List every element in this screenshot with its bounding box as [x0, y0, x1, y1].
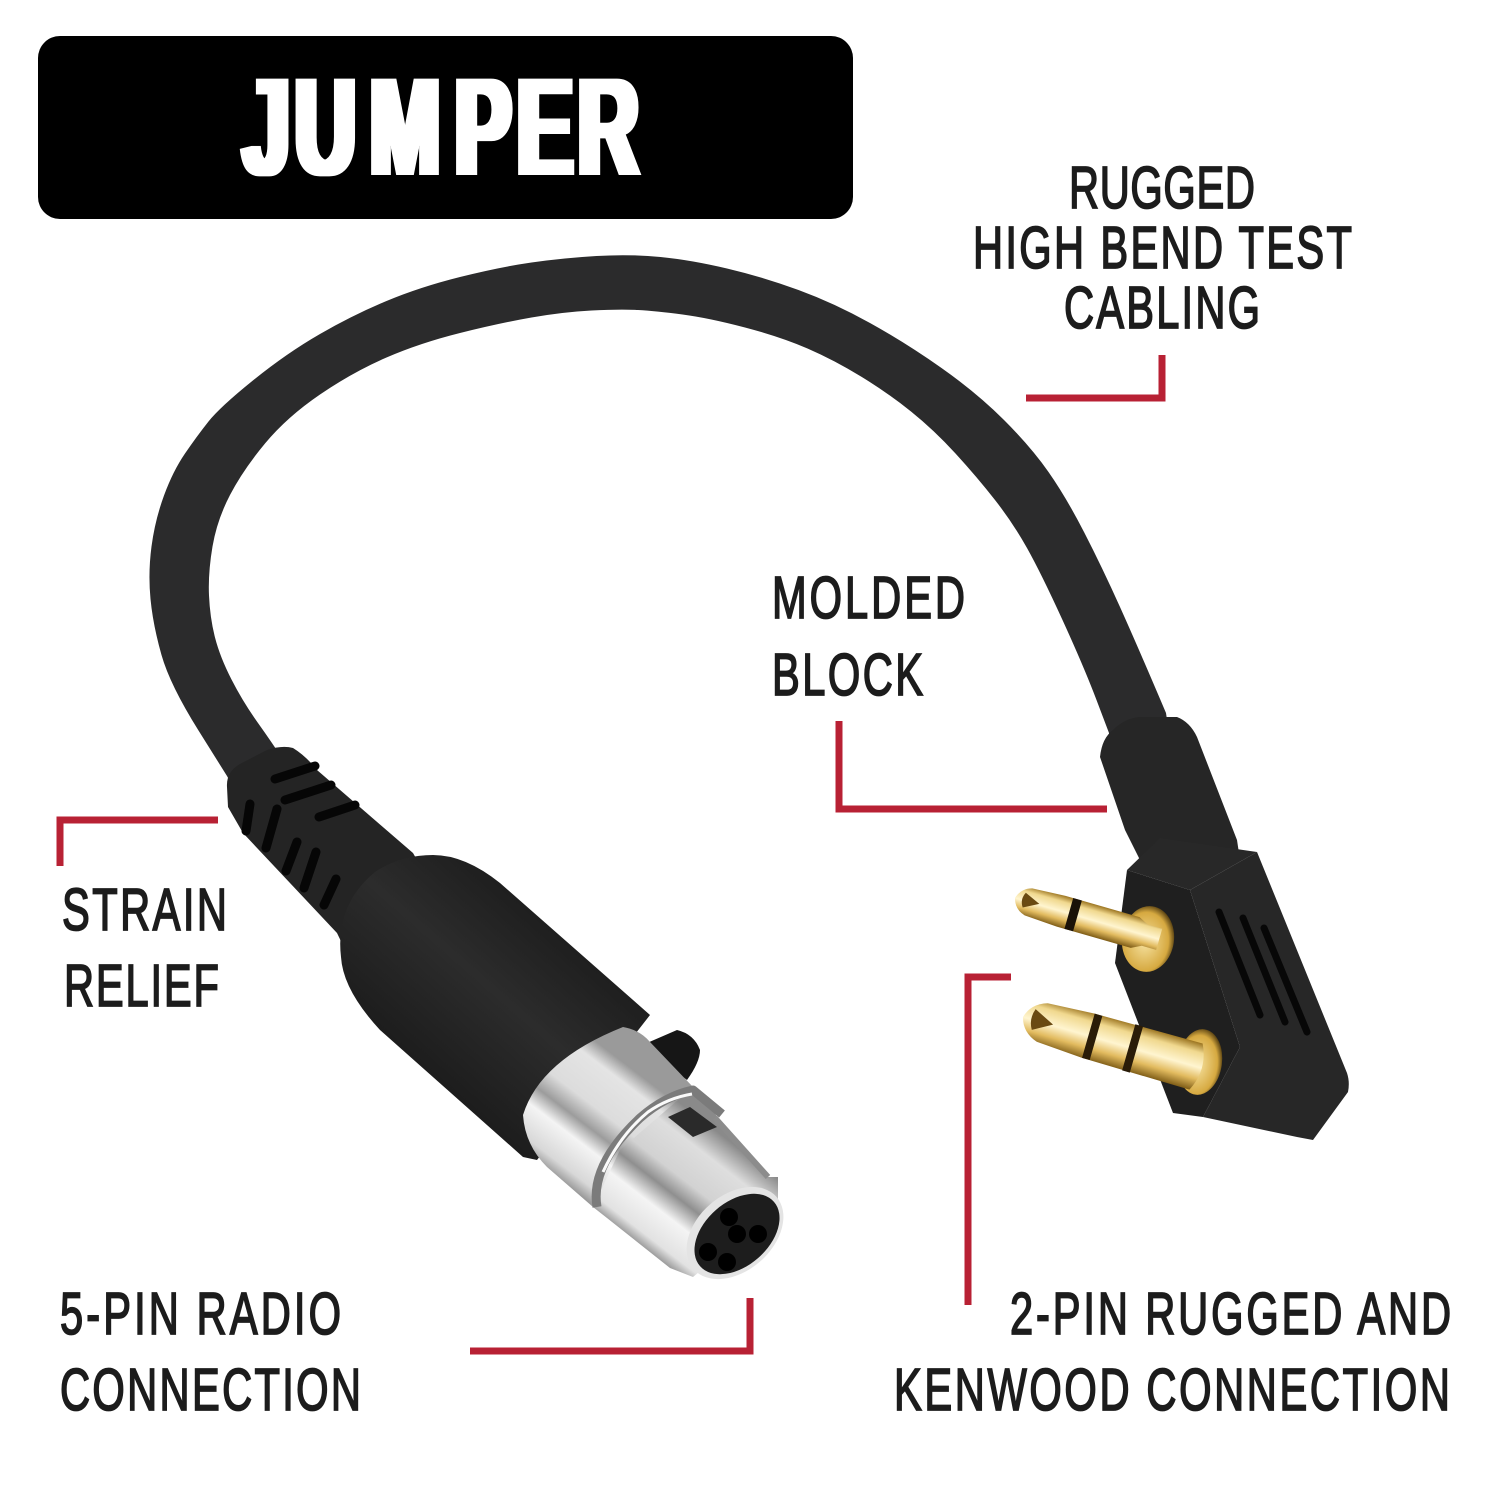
callout: strain relief: RELIEF: [64, 953, 219, 1019]
connector face with five pin holes: [669, 1168, 801, 1298]
retaining ring: [596, 1090, 722, 1207]
strain relief: [227, 747, 440, 960]
callout: 2-pin rugged and kenwood connection: [894, 977, 1451, 1423]
gold pin: upper: [1011, 883, 1178, 975]
molded block sleeve: [1100, 717, 1240, 870]
gold pin: lower: [1016, 994, 1226, 1098]
title banner: [38, 36, 853, 219]
callout: strain relief: STRAIN: [62, 877, 227, 943]
callout: rugged high bend test cabling: CABLING: [1064, 275, 1260, 341]
callout: rugged high bend test cabling: HIGH BEND TEST: [973, 215, 1352, 281]
molded block: [1115, 838, 1349, 1140]
callout: 2-pin rugged and kenwood connection: 2-PIN RUGGED AND: [1010, 1281, 1451, 1347]
product photo: jumper cable: [149, 255, 1349, 1298]
callout: molded block: [772, 565, 1107, 809]
callout: 2-pin rugged and kenwood connection: KENWOOD CONNECTION: [894, 1357, 1450, 1423]
callout: strain relief: [60, 820, 227, 1019]
callout: rugged high bend test cabling: RUGGED: [1069, 155, 1255, 221]
callout: molded block: BLOCK: [772, 642, 923, 708]
callout: 5-pin radio connection: [60, 1281, 750, 1423]
locking tab: [647, 1030, 700, 1080]
callout: molded block: MOLDED: [772, 565, 965, 631]
overmold body: [340, 855, 650, 1160]
callout: rugged high bend test cabling: [973, 155, 1352, 398]
cable: [149, 255, 1170, 800]
silver connector: [523, 1027, 801, 1298]
callout: 5-pin radio connection: 5-PIN RADIO: [60, 1281, 341, 1347]
latch notch: [668, 1107, 717, 1137]
callout: 5-pin radio connection: CONNECTION: [60, 1357, 361, 1423]
title: JUMPER: [243, 49, 639, 205]
